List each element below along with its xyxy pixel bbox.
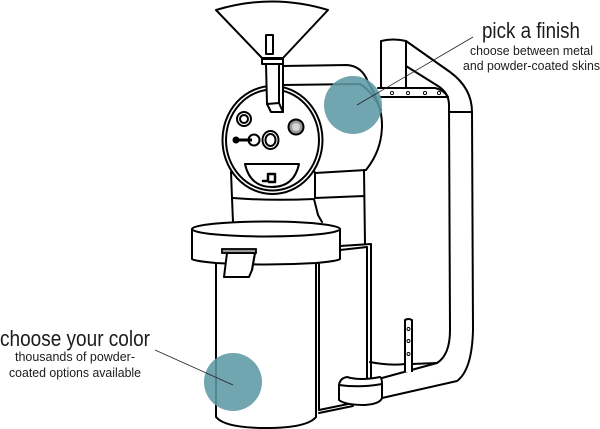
tray handle xyxy=(222,249,256,277)
icon: gauge xyxy=(288,120,304,134)
foot xyxy=(339,377,382,405)
rear frame and tank xyxy=(370,40,473,398)
text: color description xyxy=(9,350,141,380)
icon: dial xyxy=(262,131,278,149)
icon: lever xyxy=(232,134,260,146)
neck xyxy=(262,59,283,112)
hopper xyxy=(216,2,328,58)
front plate xyxy=(222,59,322,194)
text: finish description: choose between metal xyxy=(470,44,593,58)
text: color description: coated options available xyxy=(9,366,141,380)
bracket xyxy=(405,319,412,372)
tray xyxy=(192,222,340,277)
base frame xyxy=(319,244,371,413)
icon: knob xyxy=(237,112,251,126)
text: color description: thousands of powder- xyxy=(15,350,135,364)
text: finish description: and powder-coated skins xyxy=(463,59,600,73)
heading: pick a finish: pick a finish xyxy=(482,18,580,43)
bin xyxy=(216,262,319,428)
window xyxy=(245,164,299,187)
callout: finish xyxy=(324,37,473,134)
drum body xyxy=(231,65,382,244)
text: finish description xyxy=(463,44,600,73)
callout: color xyxy=(155,350,262,411)
heading: choose your color: choose your color xyxy=(0,326,150,351)
